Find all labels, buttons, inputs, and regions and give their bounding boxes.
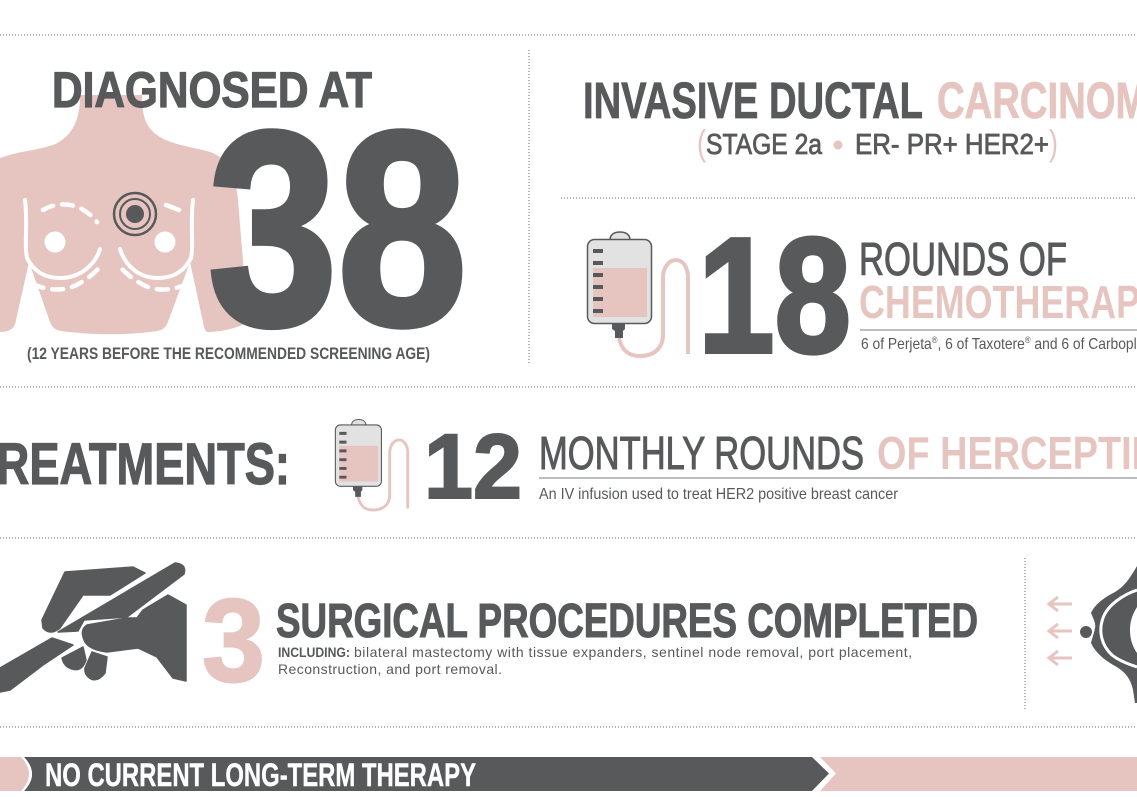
text: chemotherapy drugs: ®: [932, 335, 938, 345]
heading: rounds of chemotherapy: ROUNDS OF: [859, 233, 1067, 285]
icon: breast with arrows: [1049, 566, 1137, 703]
text: chemotherapy drugs: ®: [1025, 335, 1031, 345]
subheading: stage and receptors: STAGE 2a: [706, 129, 823, 161]
text: chemotherapy drugs: , 6 of Taxotere: [937, 336, 1025, 353]
icon: hand holding scalpel: [0, 563, 186, 692]
big number: 3: 3: [202, 575, 265, 707]
heading: monthly rounds of herceptin: MONTHLY ROUNDS: [539, 427, 864, 479]
big number: 38: 38: [208, 75, 467, 383]
icon: IV bag small: [335, 420, 408, 510]
text: surgical details: INCLUDING:: [278, 644, 350, 660]
banner: no current long-term therapy: NO CURRENT LONG-TERM THERAPY: [45, 757, 476, 793]
big number: 18: 18: [698, 204, 851, 387]
subheading: stage and receptors: ER- PR+ HER2+: [855, 129, 1049, 161]
text: surgical details: [278, 644, 912, 677]
heading: invasive ductal carcinoma: INVASIVE DUCTAL: [583, 72, 923, 129]
text: chemotherapy drugs: 6 of Perjeta: [861, 336, 943, 353]
text: herceptin description: An IV infusion used to treat HER2 positive breast cancer: [539, 486, 899, 503]
text: surgical details: Reconstruction, and port removal.: [278, 661, 502, 677]
big number: 12: 12: [424, 416, 522, 518]
subheading: stage and receptors: (: [697, 122, 706, 163]
banner: no current long-term therapy: [0, 757, 1137, 793]
caption: screening age: (12 YEARS BEFORE THE RECOMMENDED SCREENING AGE): [27, 344, 430, 363]
text: surgical details: bilateral mastectomy with tissue expanders, sentinel node removal, port placement,: [354, 644, 912, 660]
icon: tumor target: [114, 193, 156, 235]
icon: torso with surgical markings: [0, 95, 248, 334]
subheading: stage and receptors: ): [1049, 122, 1058, 163]
heading: diagnosed at: DIAGNOSED AT: [52, 62, 372, 118]
heading: rounds of chemotherapy: [859, 233, 1137, 328]
subheading: stage and receptors: [697, 122, 1058, 163]
icon: IV bag: [588, 232, 688, 356]
